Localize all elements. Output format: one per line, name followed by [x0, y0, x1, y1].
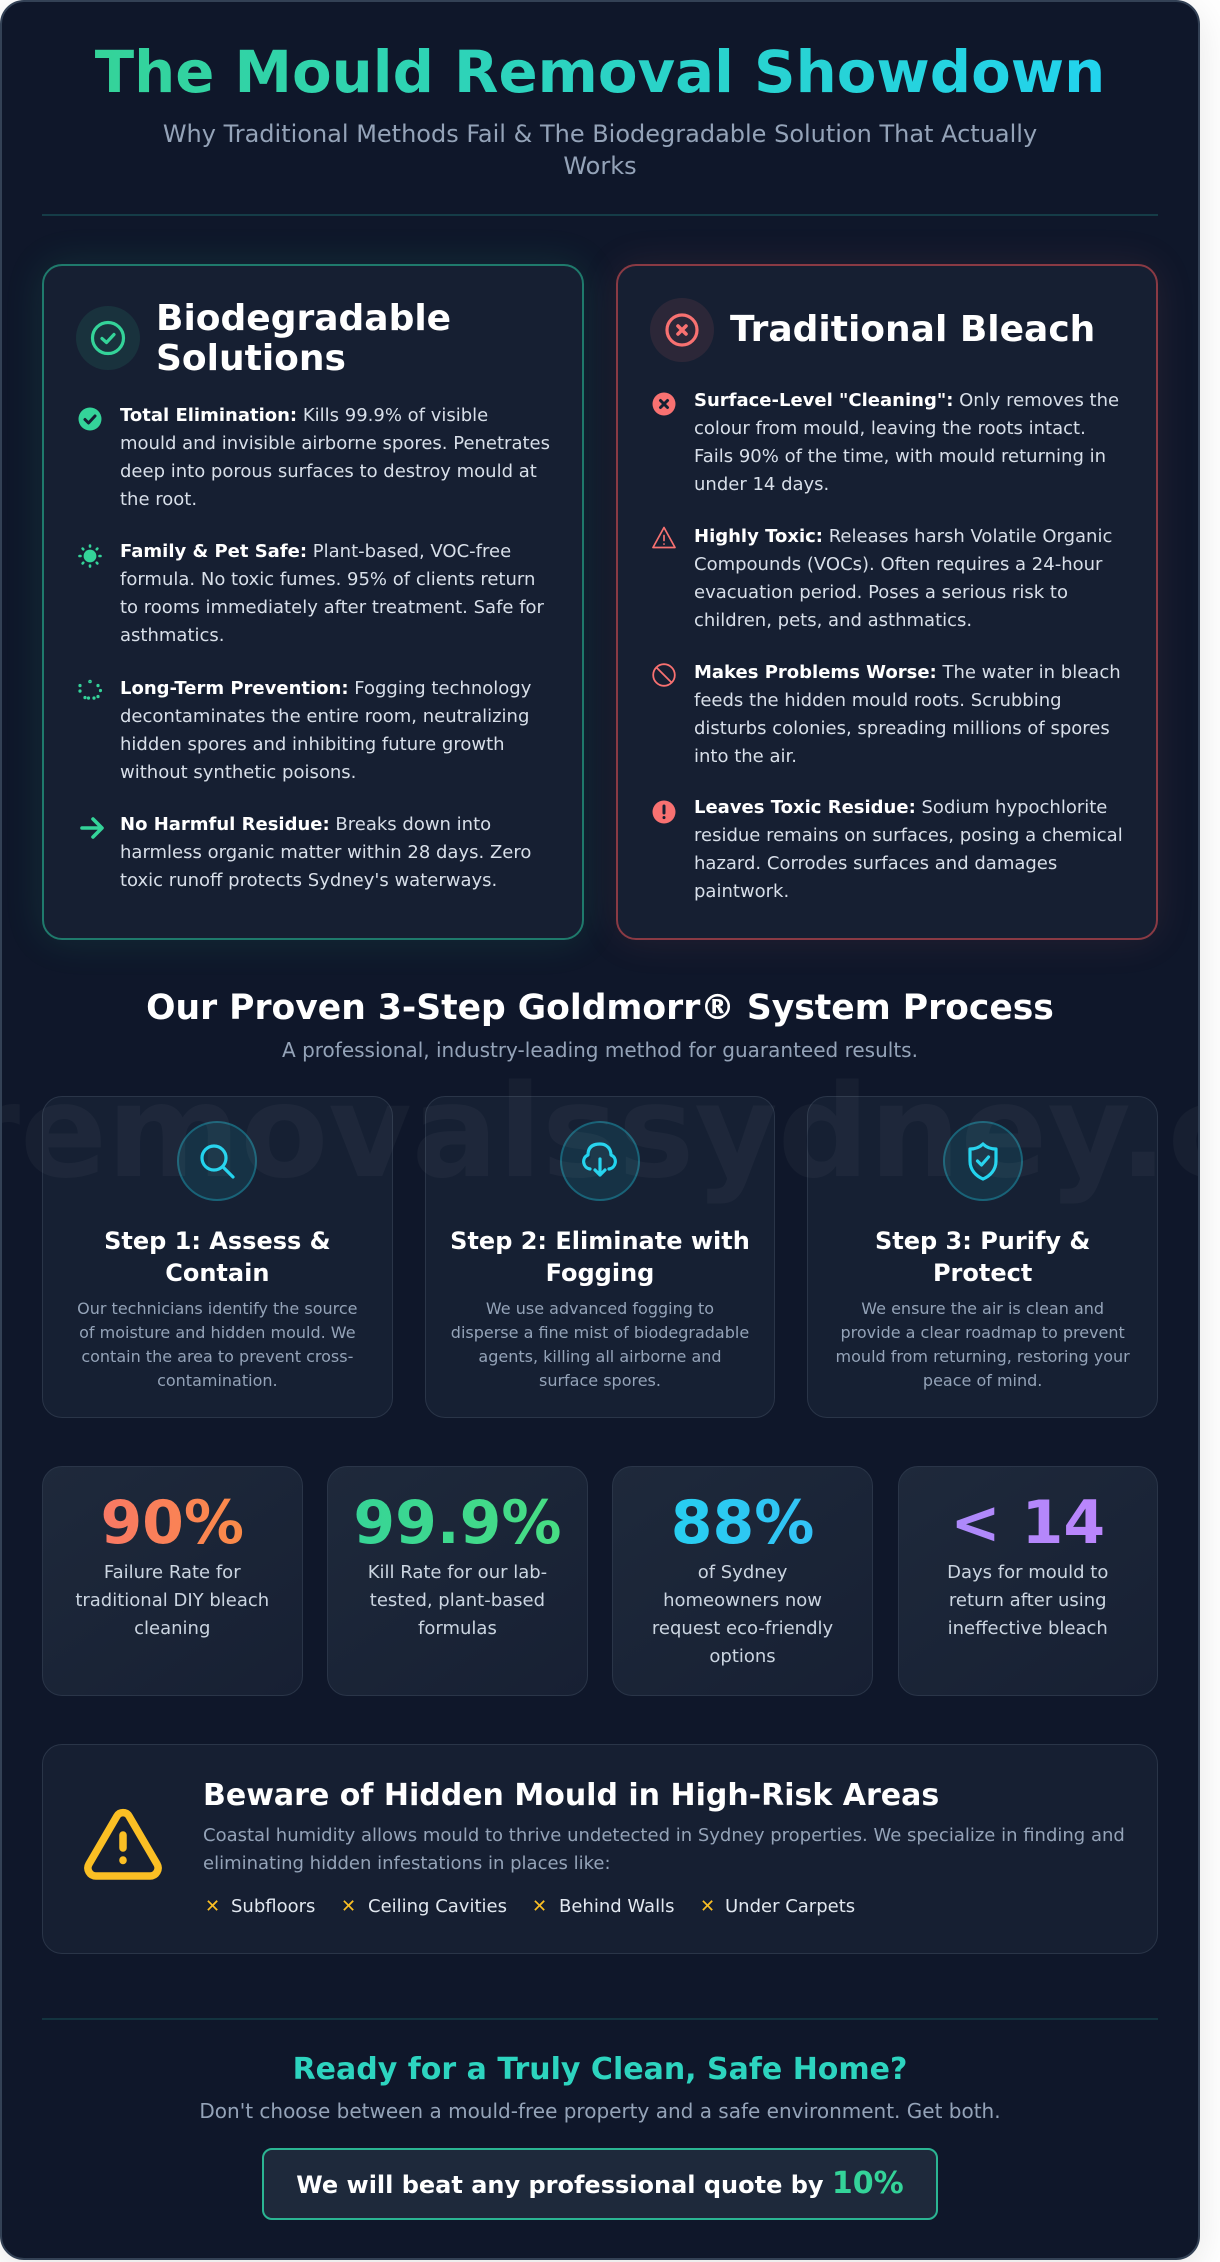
stat label: 88%: request eco-friendly — [652, 1618, 833, 1639]
text: call to action: Don't choose between a mould-free property and a safe environment. Get both. — [199, 2099, 1001, 2123]
stat label: <14 — [947, 1562, 1108, 1639]
title: The Mould Removal Showdown — [95, 38, 1105, 106]
heading: step 2 — [450, 1227, 750, 1287]
stat label: 99.9% — [368, 1562, 547, 1639]
icon: cloud download — [560, 1121, 640, 1201]
icon: bleach x circle — [650, 298, 714, 362]
section subtitle: process: A professional, industry-leading method for guaranteed results. — [282, 1038, 918, 1062]
text: leaves toxic residue: residue remains on surfaces, posing a chemical — [694, 825, 1123, 846]
text: step 1: of moisture and hidden mould. We — [79, 1323, 356, 1342]
list: risk areas: ✕ — [341, 1896, 356, 1917]
callout: quote — [262, 2148, 938, 2220]
stat card: 90% — [42, 1466, 302, 1696]
stat number: 99.9% — [327, 1483, 588, 1563]
icon: arrow — [80, 817, 104, 839]
text: warning — [203, 1825, 1125, 1874]
text: no harmful residue — [120, 814, 531, 891]
text: step 3 — [836, 1299, 1130, 1390]
heading: warning: Beware of Hidden Mould in High-Risk Areas — [203, 1778, 939, 1813]
list: risk areas: ✕ — [532, 1896, 547, 1917]
text: total elimination: deep into porous surfaces to destroy mould at — [120, 461, 537, 482]
icon: filled x — [652, 392, 676, 416]
stat label: <14: ineffective bleach — [948, 1618, 1108, 1639]
text: surface-level cleaning: Fails 90% of the time, with mould returning in — [694, 446, 1106, 467]
text: step 1: contain the area to prevent cross- — [81, 1347, 353, 1366]
heading: step 1: Contain — [165, 1259, 269, 1287]
text: step 2: agents, killing all airborne and — [478, 1347, 722, 1366]
heading: biodegradable solutions: Biodegradable — [156, 298, 451, 339]
icon: dotted spray — [78, 680, 102, 700]
list: risk areas: Ceiling Cavities — [368, 1896, 507, 1917]
divider — [42, 214, 1158, 216]
text: total elimination: the root. — [120, 489, 197, 510]
panel: step 3 — [807, 1096, 1158, 1418]
text: total elimination — [120, 405, 550, 510]
stat label: 90%: cleaning — [134, 1618, 210, 1639]
subtitle — [163, 120, 1037, 180]
text: family and pet safe — [120, 541, 544, 646]
text: highly toxic: Highly Toxic: Releases harsh Volatile Organic — [694, 526, 1112, 547]
text: family and pet safe: Family & Pet Safe: Plant-based, VOC-free — [120, 541, 511, 562]
section heading: process: Our Proven 3-Step Goldmorr® System Process — [146, 988, 1054, 1028]
text: leaves toxic residue: hazard. Corrodes surfaces and damages — [694, 853, 1057, 874]
text: surface-level cleaning: Surface-Level "Cleaning": Only removes the — [694, 390, 1119, 411]
text: makes problems worse: into the air. — [694, 746, 797, 767]
icon: filled exclamation — [652, 800, 676, 824]
text: long-term prevention: Long-Term Prevention: Fogging technology — [120, 678, 531, 699]
subtitle: Works — [563, 152, 637, 180]
text: no harmful residue: toxic runoff protects Sydney's waterways. — [120, 870, 497, 891]
text: no harmful residue: No Harmful Residue: Breaks down into — [120, 814, 491, 835]
text: step 1 — [77, 1299, 358, 1390]
text: step 2: disperse a fine mist of biodegradable — [451, 1323, 749, 1342]
text: highly toxic: children, pets, and asthmatics. — [694, 610, 972, 631]
text: step 2 — [451, 1299, 749, 1390]
stat number: 88% — [612, 1483, 873, 1563]
icon: filled check — [78, 408, 102, 430]
text: leaves toxic residue: Leaves Toxic Residue: Sodium hypochlorite — [694, 797, 1107, 818]
list: risk areas — [205, 1896, 855, 1917]
heading: step 3 — [875, 1227, 1090, 1287]
heading: step 2: Step 2: Eliminate with — [450, 1227, 750, 1255]
panel: traditional bleach — [616, 264, 1158, 940]
text: highly toxic: Compounds (VOCs). Often requires a 24-hour — [694, 554, 1102, 575]
text: highly toxic: evacuation period. Poses a serious risk to — [694, 582, 1068, 603]
stat number: 90%: 90% — [100, 1488, 244, 1558]
text: makes problems worse: feeds the hidden mould roots. Scrubbing — [694, 690, 1062, 711]
text: total elimination: Total Elimination: Kills 99.9% of visible — [120, 405, 488, 426]
stat label: 88% — [652, 1562, 833, 1667]
text: surface-level cleaning: colour from mould, leaving the roots intact. — [694, 418, 1086, 439]
stat label: <14: return after using — [949, 1590, 1107, 1611]
text: surface-level cleaning — [694, 390, 1119, 495]
text: makes problems worse: Makes Problems Worse: The water in bleach — [694, 662, 1121, 683]
text: step 1: contamination. — [157, 1371, 278, 1390]
icon: shield check — [943, 1121, 1023, 1201]
stat label: <14: Days for mould to — [947, 1562, 1108, 1583]
icon: biodegradable check circle — [76, 306, 140, 370]
stat card: <14 — [898, 1466, 1158, 1696]
panel: biodegradable solutions — [42, 264, 584, 940]
stat number: <14 — [898, 1483, 1158, 1563]
icon: warning triangle — [84, 1808, 162, 1880]
text: warning: eliminating hidden infestations in places like: — [203, 1853, 611, 1874]
stat label: 88%: options — [709, 1646, 776, 1667]
list: risk areas: ✕ — [700, 1896, 715, 1917]
panel: hidden mould warning — [42, 1744, 1158, 1954]
stat label: 90%: Failure Rate for — [104, 1562, 241, 1583]
stat number: 88%: 88% — [671, 1488, 814, 1558]
text: family and pet safe: asthmatics. — [120, 625, 224, 646]
stat number: 99.9%: 99.9% — [353, 1488, 562, 1558]
stat label: 88%: homeowners now — [663, 1590, 822, 1611]
stat label: 90%: traditional DIY bleach — [75, 1590, 269, 1611]
text: step 3: provide a clear roadmap to prevent — [840, 1323, 1125, 1342]
stat number: <14: < 14 — [950, 1488, 1105, 1558]
subtitle: Why Traditional Methods Fail & The Biodegradable Solution That Actually — [163, 120, 1037, 148]
text: step 3: peace of mind. — [923, 1371, 1042, 1390]
text: long-term prevention: decontaminates the entire room, neutralizing — [120, 706, 529, 727]
text: step 3: mould from returning, restoring your — [836, 1347, 1130, 1366]
heading: biodegradable solutions — [156, 298, 451, 379]
stat label: 90% — [75, 1562, 269, 1639]
heading: step 1: Step 1: Assess & — [104, 1227, 331, 1255]
stat label: 88%: of Sydney — [698, 1562, 787, 1583]
stat label: 99.9%: Kill Rate for our lab- — [368, 1562, 547, 1583]
text: makes problems worse: disturbs colonies, spreading millions of spores — [694, 718, 1110, 739]
text: leaves toxic residue: paintwork. — [694, 881, 789, 902]
list: risk areas: Behind Walls — [559, 1896, 674, 1917]
text: step 2: surface spores. — [539, 1371, 661, 1390]
list: risk areas: Subfloors — [231, 1896, 315, 1917]
text: long-term prevention: hidden spores and inhibiting future growth — [120, 734, 505, 755]
text: step 2: We use advanced fogging to — [486, 1299, 714, 1318]
icon: prohibited — [652, 663, 676, 687]
icon: sun — [78, 544, 102, 568]
panel: step 1 — [42, 1096, 393, 1418]
text: total elimination: mould and invisible airborne spores. Penetrates — [120, 433, 550, 454]
list: risk areas: Under Carpets — [725, 1896, 855, 1917]
icon: warning outline — [652, 526, 676, 548]
text: makes problems worse — [694, 662, 1121, 767]
stat label: 99.9%: formulas — [418, 1618, 497, 1639]
text: no harmful residue: harmless organic matter within 28 days. Zero — [120, 842, 531, 863]
text: highly toxic — [694, 526, 1112, 631]
heading: step 3: Protect — [933, 1259, 1032, 1287]
list: risk areas: ✕ — [205, 1896, 220, 1917]
stat card: 99.9% — [327, 1466, 588, 1696]
text: step 3: We ensure the air is clean and — [861, 1299, 1104, 1318]
text: surface-level cleaning: under 14 days. — [694, 474, 829, 495]
text: family and pet safe: formula. No toxic fumes. 95% of clients return — [120, 569, 535, 590]
stat card: 88% — [612, 1466, 873, 1696]
heading: traditional bleach: Traditional Bleach — [730, 309, 1095, 350]
text: leaves toxic residue — [694, 797, 1123, 902]
stat number: 90% — [42, 1483, 302, 1563]
text: long-term prevention: without synthetic poisons. — [120, 762, 356, 783]
stat label: 99.9%: tested, plant-based — [370, 1590, 545, 1611]
icon: search — [177, 1121, 257, 1201]
text: long-term prevention — [120, 678, 531, 783]
text: step 1: Our technicians identify the source — [77, 1299, 358, 1318]
divider — [42, 2018, 1158, 2020]
text: family and pet safe: to rooms immediately after treatment. Safe for — [120, 597, 544, 618]
heading: biodegradable solutions: Solutions — [156, 338, 346, 379]
callout: quote: We will beat any professional quote by 10% — [296, 2166, 904, 2201]
heading: step 2: Fogging — [546, 1259, 654, 1287]
heading: call to action: Ready for a Truly Clean, Safe Home? — [293, 2052, 907, 2087]
panel: step 2 — [425, 1096, 775, 1418]
text: warning: Coastal humidity allows mould to thrive undetected in Sydney properties. We specialize in finding and — [203, 1825, 1125, 1846]
heading: step 1 — [104, 1227, 331, 1287]
heading: step 3: Step 3: Purify & — [875, 1227, 1090, 1255]
